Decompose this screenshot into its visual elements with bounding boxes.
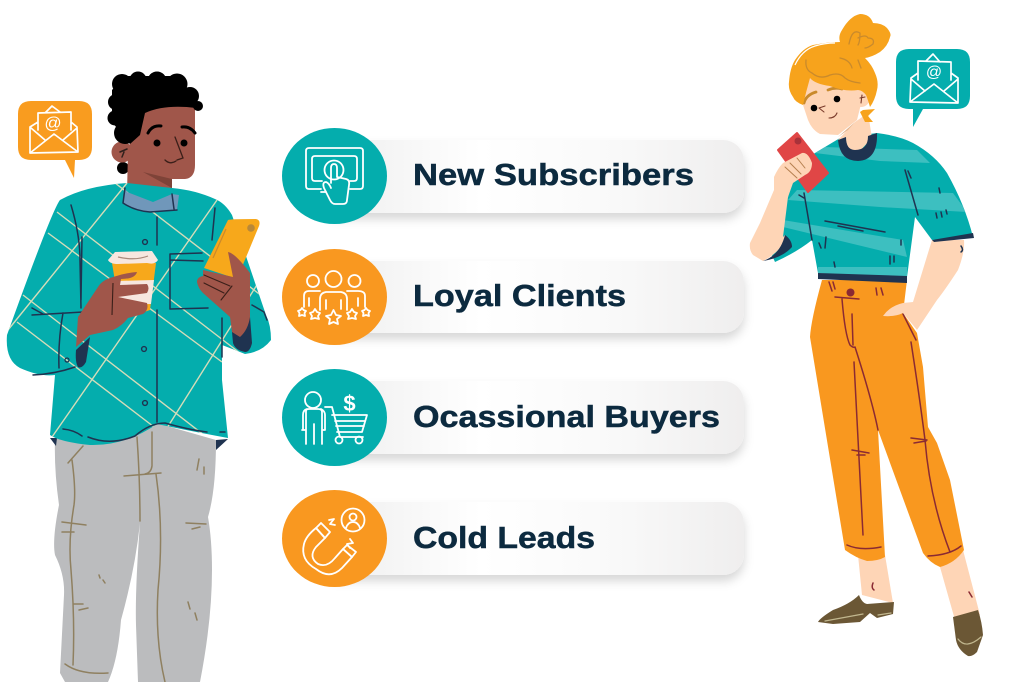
icon: magnet attracting person <box>303 508 364 574</box>
icon: envelope with at sign: @ <box>926 64 942 81</box>
pills row: cold leads <box>282 490 744 587</box>
man: coffee cup <box>108 251 158 314</box>
pills row: occasional buyers <box>282 369 744 466</box>
woman: shoes <box>818 595 983 656</box>
man: back hair, ear and head <box>112 98 195 200</box>
pills row: loyal clients: Loyal Clients <box>413 278 626 313</box>
man: shirt <box>7 183 271 445</box>
icon: envelope with at sign: @ <box>44 114 62 132</box>
man: right hand and cuff <box>197 252 252 352</box>
woman: head and face <box>803 76 870 135</box>
man: hair <box>108 72 203 144</box>
icon: clients with stars <box>298 271 370 324</box>
woman: pants <box>810 280 980 620</box>
pills row: cold leads: Cold Leads <box>413 520 595 555</box>
icon: shopper with cart: $ <box>343 391 356 416</box>
speech bubble: teal email <box>896 49 970 127</box>
man: face details <box>148 126 195 163</box>
woman: left arm, hand and cuff <box>750 153 812 261</box>
man: phone <box>204 219 260 279</box>
pills row: new subscribers: New Subscribers <box>413 157 694 192</box>
icon: shopper with cart <box>302 391 367 444</box>
man: collar <box>123 188 179 212</box>
pills row: new subscribers <box>282 128 744 224</box>
speech bubble: orange email <box>18 101 92 178</box>
woman: neck and collar <box>838 113 877 161</box>
pants: man <box>50 424 228 682</box>
man: left hand and cuff <box>76 272 148 367</box>
woman: shirt <box>765 133 974 283</box>
pills row: loyal clients <box>282 249 744 345</box>
icon: touch screen <box>306 148 363 204</box>
woman: phone <box>778 133 828 192</box>
woman: hair <box>789 14 891 122</box>
woman: right arm <box>883 240 964 330</box>
pills row: occasional buyers: Ocassional Buyers <box>413 399 720 434</box>
